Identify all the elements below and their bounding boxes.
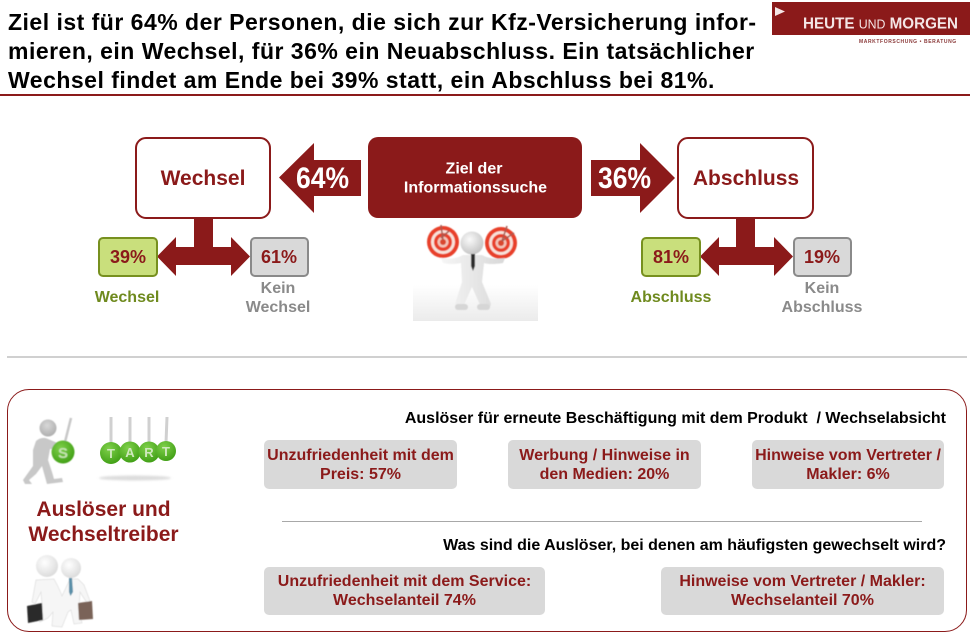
box: Ziel der Informationssuche: Ziel der xyxy=(446,160,502,178)
heading: Auslöser und Wechseltreiber: Auslöser und xyxy=(36,498,171,521)
pill: Makler xyxy=(661,567,944,615)
label: Kein Wechsel: Kein xyxy=(261,280,295,297)
box: 39%: 39% xyxy=(110,247,146,267)
question heading 1: Auslöser für erneute Beschäftigung mit dem Produkt / Wechselabsicht xyxy=(405,410,946,427)
panel: flow diagram xyxy=(94,137,863,321)
pill: Vertreter xyxy=(752,440,944,489)
title xyxy=(8,9,757,93)
label: Wechsel: Wechsel xyxy=(95,289,159,306)
balls: T xyxy=(162,444,170,459)
pill: Preis: Preis: 57% xyxy=(320,466,401,482)
box: 61% xyxy=(251,238,308,276)
question heading 2: Was sind die Auslöser, bei denen am häufigsten gewechselt wird? xyxy=(443,537,946,554)
title: Ziel ist für 64% der Personen, die sich zur Kfz-Versicherung infor- xyxy=(8,9,757,35)
arrow: 64% xyxy=(279,143,361,213)
label: Abschluss: Abschluss xyxy=(631,289,712,306)
box: 19% xyxy=(794,238,851,276)
balls xyxy=(100,441,176,464)
label: Kein Abschluss: Abschluss xyxy=(782,299,863,316)
box: 81%: 81% xyxy=(653,247,689,267)
box: 39% xyxy=(99,238,157,276)
inner divider xyxy=(282,521,922,522)
label: Kein Wechsel: Wechsel xyxy=(246,299,310,316)
branch arrow: Wechsel xyxy=(157,218,250,276)
divider xyxy=(7,356,967,358)
pill: Makler: Hinweise vom Vertreter / Makler: xyxy=(679,573,926,590)
box: Ziel der Informationssuche xyxy=(368,137,582,218)
icon: figure pushing ball: S xyxy=(58,445,68,462)
box: Abschluss xyxy=(678,138,813,218)
pill: Vertreter: Hinweise vom Vertreter / xyxy=(755,446,941,464)
icon: figure pushing ball xyxy=(22,418,76,484)
label: Kein Wechsel xyxy=(246,280,310,316)
ropes xyxy=(111,417,167,443)
icon: figure holding two targets xyxy=(413,225,538,321)
arrow: 36%: 36% xyxy=(598,162,651,195)
pill: Medien: den Medien: 20% xyxy=(540,466,669,482)
heading: Auslöser und Wechseltreiber: Wechseltreiber xyxy=(28,523,179,546)
shadow xyxy=(99,476,171,480)
logo tagline: MARKTFORSCHUNG • BERATUNG xyxy=(859,39,957,45)
panel: triggers xyxy=(7,389,967,632)
box: 81% xyxy=(642,238,700,276)
title: mieren, ein Wechsel, für 36% ein Neuabschluss. Ein tatsächlicher xyxy=(8,38,755,64)
pill: Makler: Wechselanteil 70% xyxy=(731,592,874,609)
pill: Service xyxy=(264,567,545,615)
box: Wechsel: Wechsel xyxy=(161,167,245,190)
box: 61%: 61% xyxy=(261,247,297,267)
box: Wechsel xyxy=(136,138,270,218)
balls: T xyxy=(107,446,115,461)
heading: Auslöser und Wechseltreiber xyxy=(28,498,179,546)
icon: START balls xyxy=(100,417,176,482)
box: 19%: 19% xyxy=(804,247,840,267)
pill: Service: Wechselanteil 74% xyxy=(333,592,476,609)
pill: Vertreter: Makler: 6% xyxy=(806,466,890,482)
pill: Service: Unzufriedenheit mit dem Service: xyxy=(278,573,531,590)
logo banner xyxy=(772,2,970,35)
pill: Medien: Werbung / Hinweise in xyxy=(519,446,690,464)
label: Kein Abschluss: Kein xyxy=(805,280,839,297)
box: Ziel der Informationssuche: Informationssuche xyxy=(404,180,547,196)
pill: Medien xyxy=(508,440,701,489)
logo banner: HEUTE UND MORGEN xyxy=(803,16,958,32)
balls: R xyxy=(144,445,154,460)
pill: Preis xyxy=(264,440,457,489)
icon: two business figures xyxy=(26,555,94,628)
pill: Preis: Unzufriedenheit mit dem xyxy=(267,446,454,464)
arrow: 64%: 64% xyxy=(296,162,349,195)
logo xyxy=(772,2,970,45)
arrow: 36% xyxy=(591,143,675,213)
title: Wechsel findet am Ende bei 39% statt, ein Abschluss bei 81%. xyxy=(8,67,715,93)
label: Kein Abschluss xyxy=(782,280,863,316)
header rule xyxy=(0,94,970,96)
box: Abschluss: Abschluss xyxy=(693,167,799,190)
branch arrow: Abschluss xyxy=(700,218,793,276)
balls: A xyxy=(125,445,135,460)
